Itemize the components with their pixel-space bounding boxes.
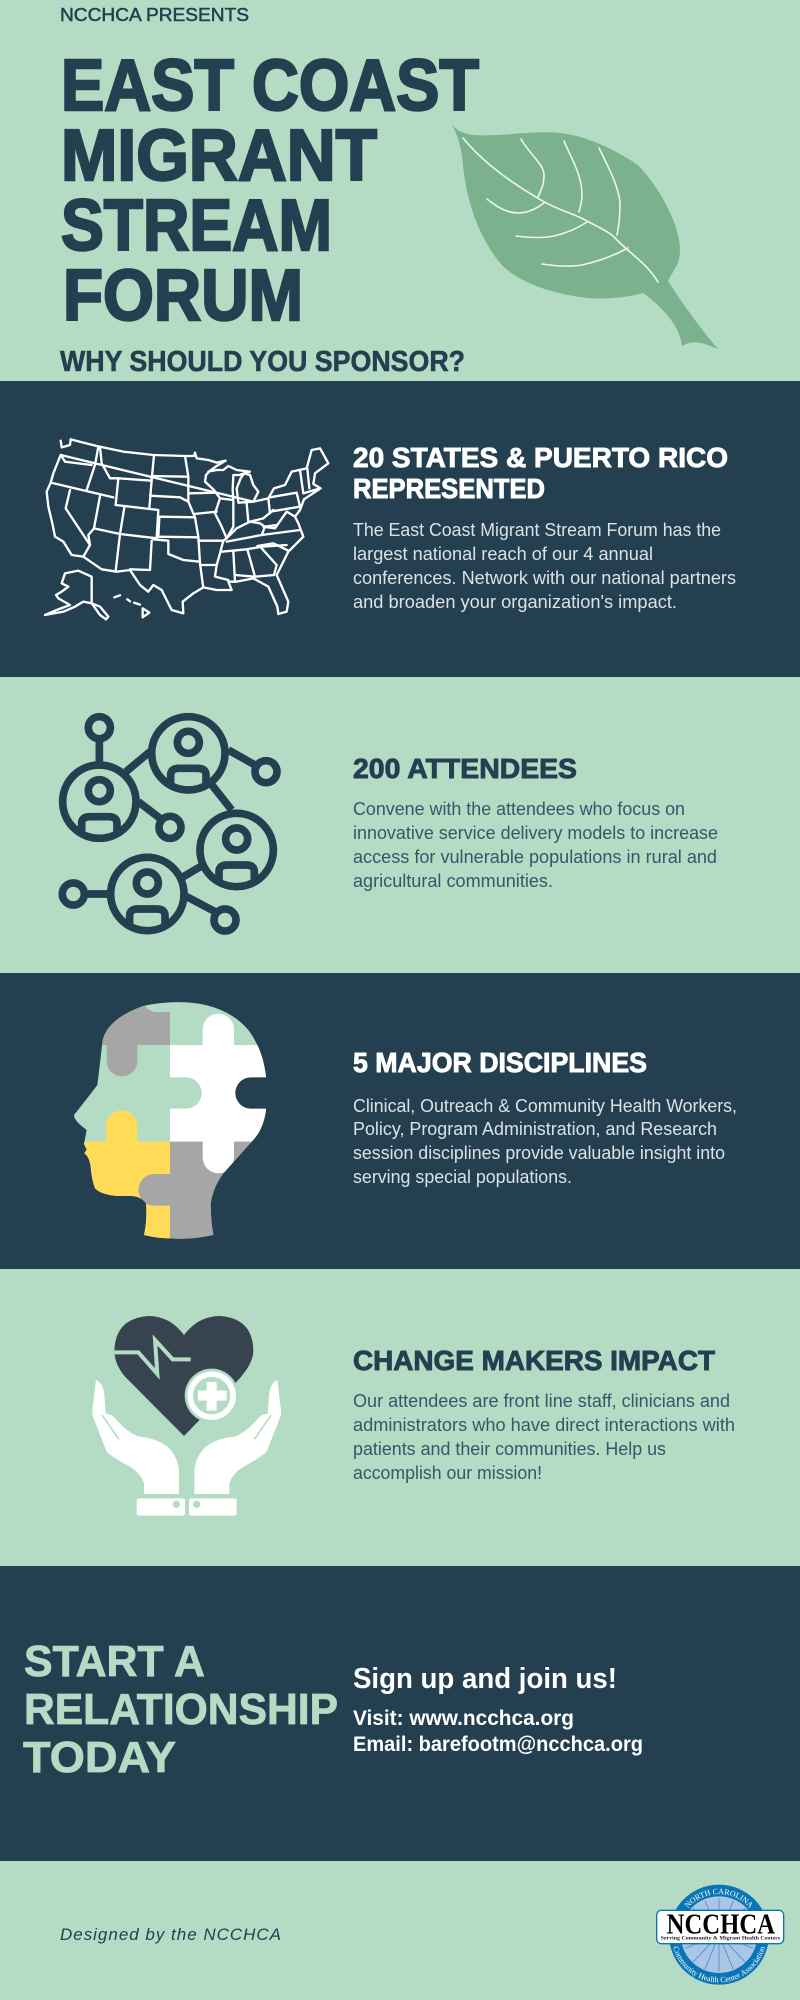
heading: start a relationship today: START A — [24, 1637, 205, 1686]
heading: start a relationship today: TODAY — [23, 1733, 176, 1782]
logo: NCCHCA seal: Community Health Center Association — [674, 1946, 765, 1982]
text block: change makers: CHANGE MAKERS IMPACT — [353, 1345, 715, 1376]
title — [61, 46, 479, 336]
text block: change makers — [353, 1345, 735, 1483]
text block: sign up and contact: Sign up and join us! — [353, 1663, 617, 1695]
text block: change makers: patients and their communities. Help us — [353, 1439, 666, 1459]
text block: disciplines: Clinical, Outreach & Community Health Workers, — [353, 1096, 737, 1116]
panel: states background — [0, 381, 800, 677]
subtitle: WHY SHOULD YOU SPONSOR? — [60, 346, 465, 378]
text block: attendees: Convene with the attendees who focus on — [353, 799, 685, 819]
title: EAST COAST — [61, 46, 479, 126]
icon: people network — [62, 717, 277, 931]
text block: disciplines: 5 MAJOR DISCIPLINES — [353, 1047, 647, 1078]
text block: states: largest national reach of our 4 annual — [353, 544, 653, 564]
footer credit: Designed by the NCCHCA — [60, 1925, 281, 1944]
text block: states: conferences. Network with our national partners — [353, 568, 736, 588]
text block: states: REPRESENTED — [353, 473, 545, 504]
panel: header background — [0, 0, 800, 381]
text block: states — [353, 442, 736, 612]
logo: NCCHCA seal: NORTH CAROLINA — [684, 1888, 752, 1908]
panel: disciplines background — [0, 973, 800, 1269]
logo: NCCHCA seal: NCCHCA — [667, 1909, 775, 1940]
panel: attendees background — [0, 677, 800, 973]
icon: puzzle head — [74, 1002, 266, 1239]
text block: disciplines: Policy, Program Administration, and Research — [353, 1119, 717, 1139]
text block: change makers: Our attendees are front line staff, clinicians and — [353, 1391, 730, 1411]
text block: sign up and contact: Email: barefootm@ncchca.org — [353, 1733, 643, 1756]
text block: states: and broaden your organization's impact. — [353, 592, 677, 612]
logo: NCCHCA seal — [656, 1884, 784, 1985]
text block: attendees: 200 ATTENDEES — [353, 753, 577, 784]
text block: disciplines: serving special populations. — [353, 1167, 572, 1187]
text block: attendees: access for vulnerable populations in rural and — [353, 847, 717, 867]
text block: states: The East Coast Migrant Stream Forum has the — [353, 520, 721, 540]
panel: call to action background — [0, 1566, 800, 1861]
text block: attendees — [353, 753, 718, 891]
panel: footer background — [0, 1861, 800, 2000]
text block: disciplines — [353, 1047, 737, 1187]
icon: leaf — [451, 123, 718, 349]
title: FORUM — [63, 256, 303, 336]
heading: start a relationship today — [23, 1637, 338, 1782]
text block: change makers: administrators who have direct interactions with — [353, 1415, 735, 1435]
text block: sign up and contact — [353, 1663, 643, 1756]
text block: change makers: accomplish our mission! — [353, 1463, 542, 1483]
eyebrow: NCCHCA presents: NCCHCA PRESENTS — [60, 5, 249, 25]
title: STREAM — [61, 186, 332, 266]
title: MIGRANT — [61, 116, 377, 196]
text block: states: 20 STATES & PUERTO RICO — [353, 442, 728, 473]
text block: attendees: agricultural communities. — [353, 871, 553, 891]
panel: change makers background — [0, 1269, 800, 1566]
logo: NCCHCA seal: Serving Community & Migrant Health Centers — [661, 1936, 781, 1942]
icon: map of the United States — [45, 439, 328, 619]
text block: sign up and contact: Visit: www.ncchca.org — [353, 1707, 574, 1730]
heading: start a relationship today: RELATIONSHIP — [24, 1685, 338, 1734]
text block: disciplines: session disciplines provide valuable insight into — [353, 1143, 725, 1163]
icon: heart in caring hands — [92, 1316, 281, 1516]
text block: attendees: innovative service delivery models to increase — [353, 823, 718, 843]
